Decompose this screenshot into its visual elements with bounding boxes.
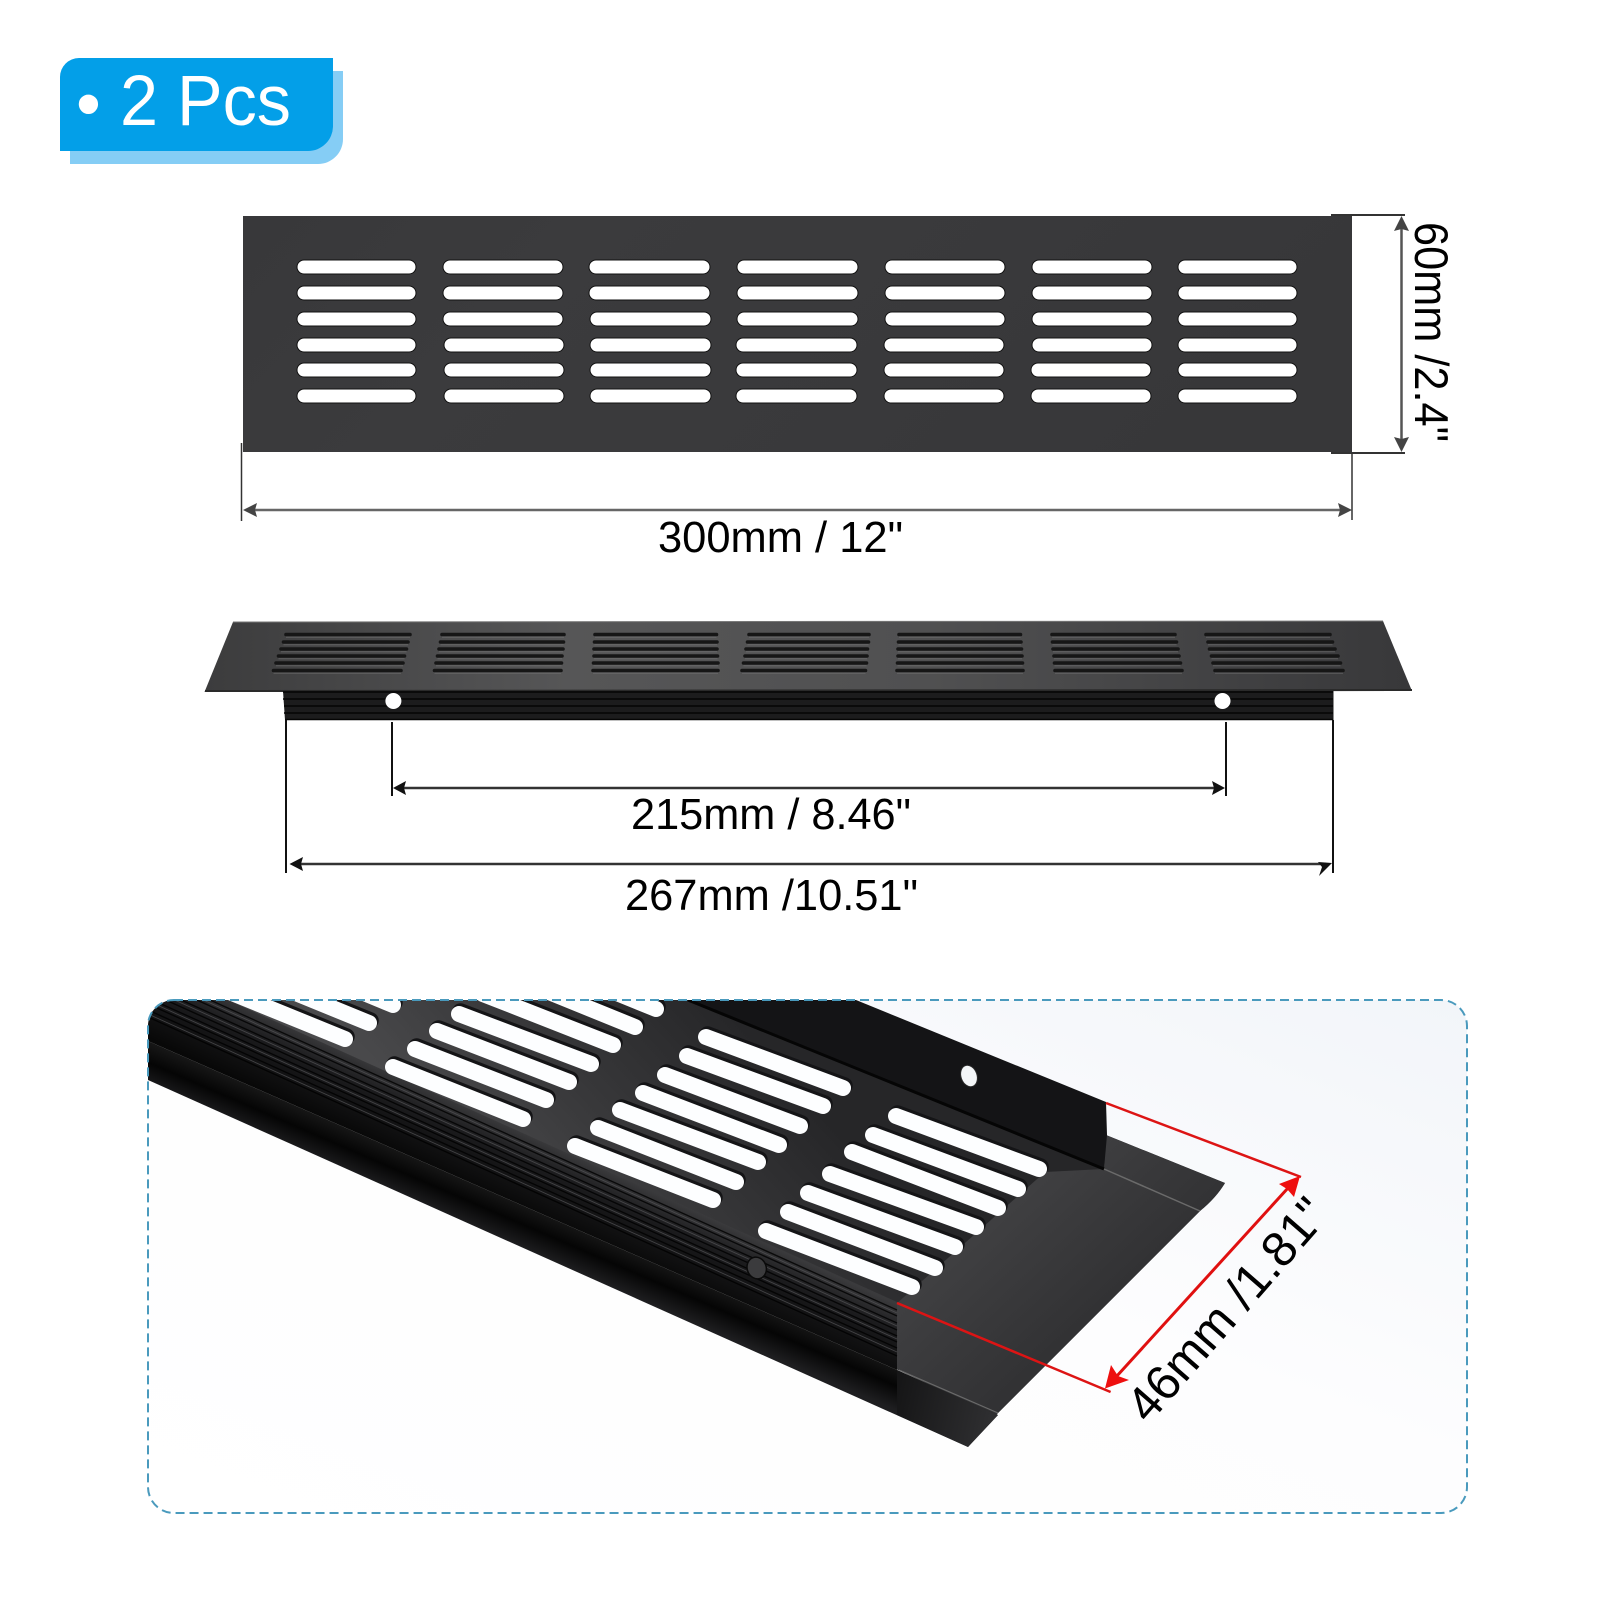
close-up vent photo: [148, 1000, 1225, 1447]
height arrow: [1400, 225, 1403, 443]
rib lines: [148, 972, 897, 1356]
ribbed front strip: [148, 1000, 897, 1370]
badge text: •: [76, 65, 101, 144]
right plate crease: [1104, 1169, 1200, 1211]
width label: 300mm / 12": [658, 513, 903, 562]
badge text: 2 Pcs: [120, 62, 291, 141]
slot highlights: [274, 637, 1343, 673]
dimension: 215mm hole spacing: [392, 722, 1226, 839]
46mm label: 46mm /1.81": [1116, 1188, 1339, 1432]
badge body: [60, 58, 333, 151]
red arrowheads: [1105, 1176, 1300, 1388]
plate lower edge: [205, 690, 1412, 691]
body length label: 267mm /10.51": [625, 871, 918, 920]
panel background: [148, 1000, 1467, 1513]
back flange: [688, 1000, 1107, 1169]
badge shadow: [70, 71, 343, 164]
width extension lines: [242, 443, 1352, 521]
top surface and right plate: [220, 1000, 1225, 1415]
red arrow shaft: [1116, 1188, 1288, 1377]
flange mounting hole: [960, 1064, 978, 1088]
photo slot shadows: [270, 1000, 1049, 1290]
height arrowheads: [1394, 216, 1409, 452]
red extension lines: [897, 1103, 1301, 1392]
lower flange crease: [899, 1370, 998, 1413]
panel: close-up photo: [148, 948, 1467, 1513]
lower flange tip: [897, 1370, 998, 1447]
width arrowheads: [243, 503, 1352, 517]
left mounting hole: [385, 693, 401, 709]
panel dashed border: [148, 1000, 1467, 1513]
side view vent grille: [204, 621, 1412, 720]
hole spacing arrow: [400, 787, 1218, 789]
photo slots: [228, 1000, 1047, 1295]
back flange crease: [688, 1000, 1104, 1169]
side view plate: [204, 621, 1412, 692]
dimension: 267mm body length: [286, 720, 1333, 920]
body length arrow: [296, 863, 1326, 865]
height extension lines: [1331, 215, 1405, 453]
right plate shading: [895, 1135, 1225, 1415]
right mounting hole: [1214, 693, 1230, 709]
slot columns: [297, 260, 1297, 403]
lower band: [148, 1041, 998, 1447]
hole spacing extension lines: [392, 722, 1226, 796]
height label: 60mm /2.4": [1405, 222, 1458, 442]
hole spacing arrowheads: [393, 781, 1225, 795]
body length arrowheads: [290, 857, 1332, 876]
plate top highlight: [233, 621, 1383, 622]
dimension: 60mm height: [1331, 215, 1458, 453]
top view vent grille: [243, 216, 1352, 452]
rib lines: [283, 692, 1333, 720]
body length extension lines: [286, 720, 1333, 873]
grille plate: [243, 216, 1352, 452]
side view rib strip: [283, 691, 1334, 720]
red dimension: 46mm: [897, 1103, 1339, 1432]
dimension: 300mm width: [242, 443, 1352, 562]
side view slots: [274, 634, 1343, 670]
hole spacing label: 215mm / 8.46": [631, 790, 911, 839]
badge: 2 Pcs: [60, 58, 343, 164]
strip mounting hole: [746, 1256, 768, 1280]
width arrow: [250, 509, 1344, 511]
rib highlights: [148, 975, 897, 1352]
